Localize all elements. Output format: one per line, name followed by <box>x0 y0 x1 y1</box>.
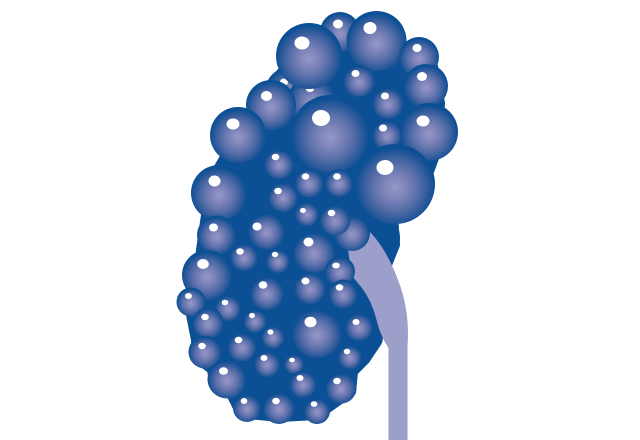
cyst <box>208 360 246 398</box>
cyst lower centre large <box>292 308 342 358</box>
cyst <box>325 169 353 197</box>
cyst <box>320 204 350 236</box>
cyst <box>304 398 330 424</box>
cyst right <box>404 64 448 108</box>
cyst <box>192 308 224 338</box>
cyst <box>266 249 290 273</box>
cyst top <box>320 12 360 52</box>
cyst <box>372 120 402 150</box>
cyst <box>328 280 358 308</box>
cyst <box>250 276 284 310</box>
cyst right large <box>400 103 458 161</box>
cyst <box>248 212 285 250</box>
cyst <box>325 256 355 286</box>
cyst <box>262 326 284 348</box>
cyst <box>263 392 295 424</box>
cyst top left large <box>276 23 342 89</box>
cysts <box>176 11 458 424</box>
cyst <box>326 372 356 404</box>
cyst <box>290 370 316 398</box>
cyst <box>176 288 206 316</box>
cyst <box>372 87 404 119</box>
cyst back middle <box>288 76 336 124</box>
cyst <box>244 310 266 332</box>
cyst <box>268 182 298 212</box>
cyst right lower large <box>355 144 435 224</box>
cyst <box>294 272 326 304</box>
cyst <box>233 394 261 422</box>
cyst <box>215 295 241 321</box>
cyst <box>293 231 335 273</box>
cyst <box>345 313 373 341</box>
cyst <box>294 168 324 198</box>
cyst <box>338 345 362 369</box>
cyst <box>264 149 294 179</box>
cyst <box>188 336 222 368</box>
cyst <box>343 65 375 97</box>
cyst <box>210 107 266 163</box>
cyst <box>284 354 304 374</box>
cyst <box>197 216 236 254</box>
cyst upper right <box>399 37 439 77</box>
cyst <box>254 351 280 377</box>
cyst <box>230 243 258 271</box>
cyst centre largest <box>291 95 369 173</box>
kidney body <box>190 28 441 418</box>
cyst back left <box>265 67 315 117</box>
cyst <box>191 165 247 221</box>
cyst <box>295 202 319 226</box>
cyst top right large <box>346 11 406 71</box>
cyst <box>246 80 296 130</box>
cyst <box>228 332 256 362</box>
cyst behind <box>334 215 370 251</box>
ureter <box>348 232 408 440</box>
cyst <box>182 250 232 300</box>
